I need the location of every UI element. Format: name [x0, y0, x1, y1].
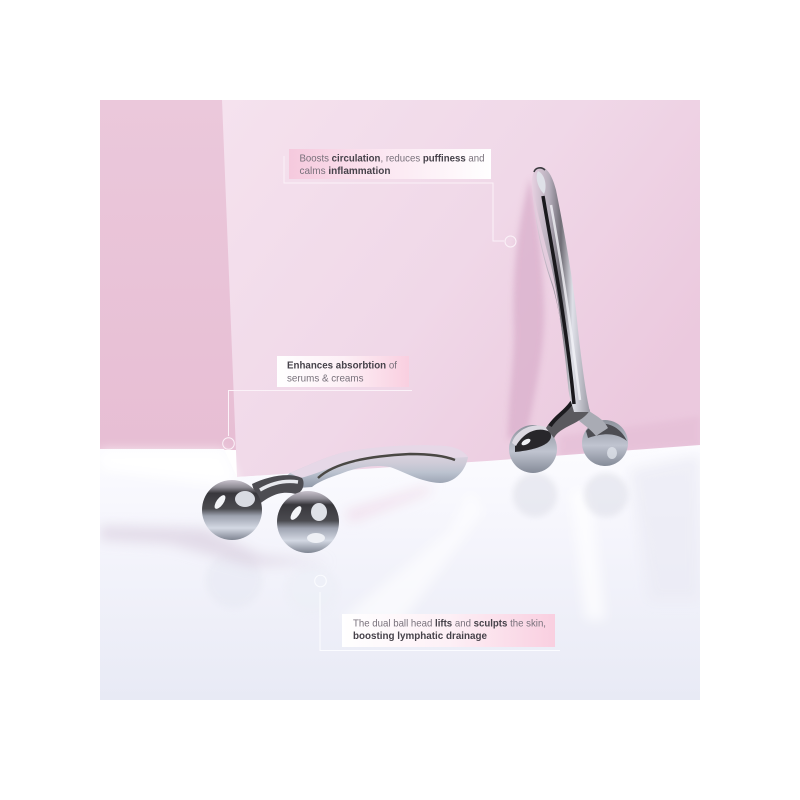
label text: Boosts circulation, reduces puffiness and [300, 152, 485, 164]
handle dark streak [318, 454, 455, 478]
infographic scene [100, 100, 700, 700]
floor roller [202, 445, 468, 553]
left ball [202, 480, 262, 540]
callout: circulation [284, 149, 516, 247]
marker circle [315, 575, 326, 587]
neck [252, 475, 304, 505]
reflection of roller balls [514, 473, 627, 516]
handle tip dark rim [534, 168, 545, 172]
shadow of standing roller [508, 178, 544, 440]
label bar [289, 149, 491, 179]
label text: Enhances absorbtion of [287, 360, 397, 372]
right ball [277, 491, 339, 553]
callout: lymphatic drainage: boosting lymphatic drainage [353, 630, 487, 642]
left ball rim [512, 425, 550, 446]
callout: absorption: serums & creams [287, 372, 364, 384]
darker pink band low on the board [564, 436, 582, 452]
marker circle [505, 236, 516, 247]
marker circle [223, 438, 234, 449]
roller arm right [573, 406, 608, 436]
handle body [270, 445, 468, 490]
handle bright streak [551, 205, 580, 400]
pink back wall [100, 100, 240, 450]
callout: absorption [223, 356, 412, 449]
handle tip highlight [537, 171, 546, 194]
callout: lymphatic drainage [315, 575, 560, 650]
shadow of floor roller [100, 484, 435, 566]
connector line [228, 390, 412, 436]
handle pink-lit left side [533, 190, 567, 385]
connector line [320, 592, 560, 650]
photo area [100, 100, 700, 700]
callout: circulation: calms inflammation [300, 165, 390, 177]
right ball [582, 420, 628, 466]
connector line [284, 156, 504, 241]
handle dark streak [543, 196, 574, 404]
label bar [277, 356, 409, 387]
roller arm left [546, 396, 590, 438]
label bar [342, 614, 555, 647]
right ball upper band [586, 424, 627, 441]
handle body [532, 167, 590, 412]
left ball [509, 425, 557, 473]
white reflective floor [100, 445, 700, 700]
floor reflections [100, 451, 700, 625]
left ball dark band [515, 429, 551, 452]
standing roller [509, 167, 628, 473]
label text: The dual ball head lifts and sculpts the skin, [353, 618, 546, 630]
handle top face [290, 445, 468, 478]
pink display board [222, 100, 700, 477]
